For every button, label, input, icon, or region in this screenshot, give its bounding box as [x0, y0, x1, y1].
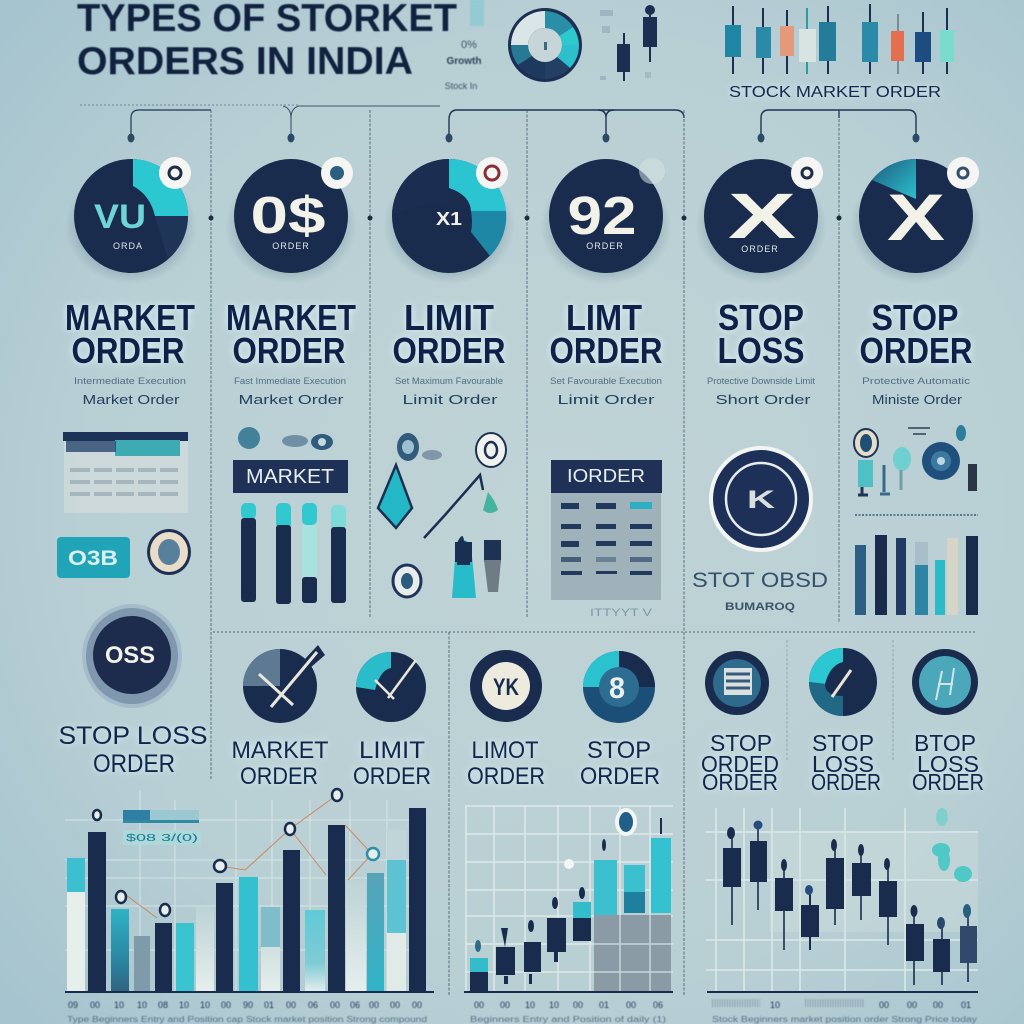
- icon: segmented circle: X1: [436, 209, 462, 229]
- icon: x circle with wedge: [859, 157, 979, 273]
- icon: donut chart: [508, 8, 582, 82]
- labels: second row: ORDER: [467, 763, 545, 790]
- icon: pie circle: VU: [94, 198, 146, 236]
- icon: OSS circle: OSS: [105, 642, 155, 669]
- axis labels: middle chart: 10: [525, 1000, 535, 1010]
- icon: header candlesticks: [600, 5, 657, 81]
- heading: ORDER: [550, 330, 662, 371]
- axis labels: left chart: 00: [221, 1000, 231, 1010]
- panel: left column table: [63, 432, 188, 513]
- panel: stop loss: Short Order: [716, 393, 810, 407]
- labels: second row: ORDER: [240, 763, 318, 790]
- axis labels: middle chart: Beginners Entry and Position of daily (1): [470, 1015, 666, 1024]
- icons: limit order: [378, 433, 506, 598]
- labels: second row: STOP: [812, 730, 874, 756]
- heading: ORDER: [232, 330, 346, 371]
- axis labels: middle chart: 06: [653, 1000, 663, 1010]
- icon: target: K: [747, 486, 775, 514]
- panel: market order 2: Fast Immediate Execution: [234, 376, 346, 386]
- small header captions: [445, 39, 482, 91]
- axis labels: left chart: Type Beginners Entry and Position cap Stock market position Strong compound: [67, 1015, 427, 1024]
- axis labels: right chart: 01: [961, 1000, 971, 1010]
- labels: second row: ORDER: [912, 769, 984, 795]
- panel: stop order: Protective Automatic: [862, 376, 971, 386]
- row: limit order badge icon: [470, 650, 542, 722]
- axis labels: left chart: [67, 1000, 427, 1024]
- panel: stop loss: Protective Downside Limit: [707, 376, 816, 386]
- chart: middle grid bars: [464, 805, 673, 992]
- trend line: [122, 795, 372, 918]
- text: stop order caption: STOT OBSD: [692, 569, 828, 592]
- panel: limit order 1: Limit Order: [402, 393, 498, 407]
- icon: percent circle: 0$: [250, 187, 326, 245]
- icon: percent circle: [234, 157, 353, 273]
- heading: [550, 297, 662, 371]
- panel: limit order 2: Limit Order: [558, 393, 654, 407]
- labels: second row: ORDER: [811, 769, 881, 795]
- axis labels: left chart: 00: [412, 1000, 422, 1010]
- legend: [123, 810, 201, 845]
- labels: second row: [232, 730, 984, 795]
- chart marker: ring: [617, 810, 635, 834]
- axis labels: middle chart: 00: [474, 1000, 484, 1010]
- icon: teal badge: O3B: [68, 547, 118, 570]
- chart: market bars: [241, 503, 346, 604]
- heading: ORDER: [72, 330, 184, 371]
- panel: order table: IORDER: [567, 466, 645, 486]
- panel: limit order 1: Set Maximum Favourable: [395, 376, 503, 386]
- heading: stop loss order: ORDER: [93, 750, 175, 778]
- heading: MARKET: [226, 297, 356, 338]
- heading: stock market order: STOCK MARKET ORDER: [729, 84, 941, 101]
- axis labels: middle chart: 00: [500, 1000, 510, 1010]
- panel: order table: ITTYYT V: [590, 607, 653, 619]
- small header captions: 0%: [461, 39, 477, 51]
- heading: LIMT: [566, 297, 642, 338]
- connector nodes: [128, 134, 920, 142]
- icon: segmented circle: [392, 157, 508, 273]
- labels: second row: BTOP: [914, 730, 976, 756]
- row: stop order segmented icon: 8: [609, 672, 625, 705]
- icon: OSS circle: [82, 604, 182, 708]
- column dividers: [211, 110, 975, 996]
- heading: [226, 297, 356, 371]
- text: stop order caption: [692, 569, 828, 613]
- labels: second row: LOSS: [812, 751, 874, 777]
- axis labels: right chart: 00: [879, 1000, 889, 1010]
- banner: market: [233, 460, 348, 493]
- row: teal circle icon: [912, 649, 978, 715]
- chart markers: [475, 818, 662, 984]
- labels: second row: STOP: [710, 730, 772, 756]
- heading: [860, 297, 972, 371]
- axis labels: left chart: 10: [179, 1000, 189, 1010]
- heading: ORDER: [860, 330, 972, 371]
- icon: trend line: [424, 475, 483, 538]
- small header captions: Growth: [446, 56, 482, 67]
- panel: market order 1: [65, 157, 197, 407]
- icon: target: [709, 446, 813, 552]
- row: stop order segmented icon: [583, 651, 655, 723]
- labels: second row: ORDED: [701, 751, 779, 777]
- axis labels: left chart: 06: [350, 1000, 360, 1010]
- chart: stop order bars: [855, 535, 978, 615]
- icon: number circle: [549, 158, 665, 273]
- banner: market: MARKET: [246, 466, 334, 488]
- icon: x circle with wedge: X: [887, 180, 945, 254]
- row: menu icon: [705, 651, 769, 715]
- icon: x circle: [704, 157, 823, 273]
- text: stop order caption: BUMAROQ: [725, 601, 796, 613]
- chart: top right candlesticks: [725, 4, 954, 74]
- axis labels: right chart: [712, 1000, 977, 1024]
- panel: market order 1: Market Order: [82, 393, 180, 407]
- axis labels: left chart: 00: [90, 1000, 100, 1010]
- connector brackets: [80, 105, 916, 138]
- labels: second row: ORDER: [580, 763, 660, 790]
- labels: second row: LIMOT: [472, 737, 539, 764]
- icons: market row: [238, 427, 333, 450]
- icon: pie circle: ORDA: [113, 241, 143, 251]
- icon: percent circle: ORDER: [272, 241, 310, 251]
- row: limit order badge icon: YK: [493, 674, 520, 701]
- axis labels: left chart: 90: [243, 1000, 253, 1010]
- axis labels: right chart: 00: [933, 1000, 943, 1010]
- heading: [65, 297, 195, 371]
- labels: second row: LIMIT: [359, 737, 425, 764]
- axis labels: right chart: 10: [770, 1000, 780, 1010]
- title: ORDERS IN INDIA: [77, 40, 413, 83]
- panel: market order 2: Market Order: [238, 393, 344, 407]
- title: [77, 0, 484, 83]
- heading: STOP: [872, 297, 958, 338]
- axis labels: right chart: Stock Beginners market position order Strong Price today: [712, 1015, 977, 1024]
- axis labels: left chart: 10: [137, 1000, 147, 1010]
- labels: second row: MARKET: [232, 737, 329, 764]
- icon: number circle: 92: [568, 186, 636, 246]
- chart: left bar chart: [65, 789, 434, 992]
- icon: x circle: ORDER: [741, 244, 779, 254]
- axis labels: left chart: 00: [390, 1000, 400, 1010]
- axis labels: left chart: 08: [158, 1000, 168, 1010]
- legend: $08 3/(0): [126, 833, 198, 844]
- heading: STOP: [718, 297, 804, 338]
- panel: stop order: Ministe Order: [872, 393, 962, 407]
- panel: market order 2: [225, 157, 357, 407]
- icon: number circle: ORDER: [586, 241, 624, 251]
- heading: stop loss order: STOP LOSS: [58, 722, 208, 750]
- chart markers: [93, 789, 379, 916]
- panel: limit order 1: [383, 157, 515, 407]
- axis labels: middle chart: [470, 1000, 666, 1024]
- panel: market order 1: Intermediate Execution: [74, 376, 186, 386]
- row: gauge icon: [809, 648, 877, 716]
- axis labels: left chart: 00: [369, 1000, 379, 1010]
- heading: stop loss order: [58, 722, 208, 778]
- axis labels: middle chart: 00: [626, 1000, 636, 1010]
- heading: MARKET: [65, 297, 195, 338]
- axis labels: left chart: 06: [308, 1000, 318, 1010]
- heading: ORDER: [392, 330, 506, 371]
- row: market order clock icon: [243, 645, 325, 723]
- labels: second row: ORDER: [702, 769, 778, 795]
- heading: [718, 297, 804, 371]
- axis labels: middle chart: 01: [599, 1000, 609, 1010]
- icon: teal leaves: [932, 808, 972, 882]
- axis labels: left chart: 01: [264, 1000, 274, 1010]
- axis labels: middle chart: 10: [549, 1000, 559, 1010]
- axis labels: left chart: 09: [68, 1000, 78, 1010]
- heading: [392, 297, 506, 371]
- axis labels: left chart: 00: [286, 1000, 296, 1010]
- axis labels: left chart: 10: [200, 1000, 210, 1010]
- axis labels: middle chart: 00: [573, 1000, 583, 1010]
- axis labels: right chart: 00: [907, 1000, 917, 1010]
- chart: right candlesticks: [706, 808, 978, 992]
- icon: teal badge: [57, 537, 130, 578]
- labels: second row: ORDER: [353, 763, 431, 790]
- panel: stop order: [850, 157, 982, 407]
- axis labels: left chart: 10: [114, 1000, 124, 1010]
- icons: stop order: [854, 425, 978, 515]
- heading: LOSS: [718, 330, 804, 371]
- axis labels: left chart: 00: [330, 1000, 340, 1010]
- small header captions: Stock In: [445, 81, 477, 91]
- panel: limit order 2: Set Favourable Execution: [550, 376, 662, 386]
- icon: x circle: X: [728, 180, 796, 252]
- icon: coin: [147, 529, 191, 575]
- row: limit order clock icon: [356, 652, 426, 722]
- heading: LIMIT: [404, 297, 494, 338]
- panel: limit order 2: [540, 158, 672, 407]
- panel: stop loss: [695, 157, 827, 407]
- panel: order table: [551, 460, 662, 619]
- icon: teal gem: [378, 465, 412, 528]
- labels: second row: STOP: [587, 737, 651, 764]
- icon: pie circle: [74, 157, 191, 273]
- labels: second row: LOSS: [917, 751, 979, 777]
